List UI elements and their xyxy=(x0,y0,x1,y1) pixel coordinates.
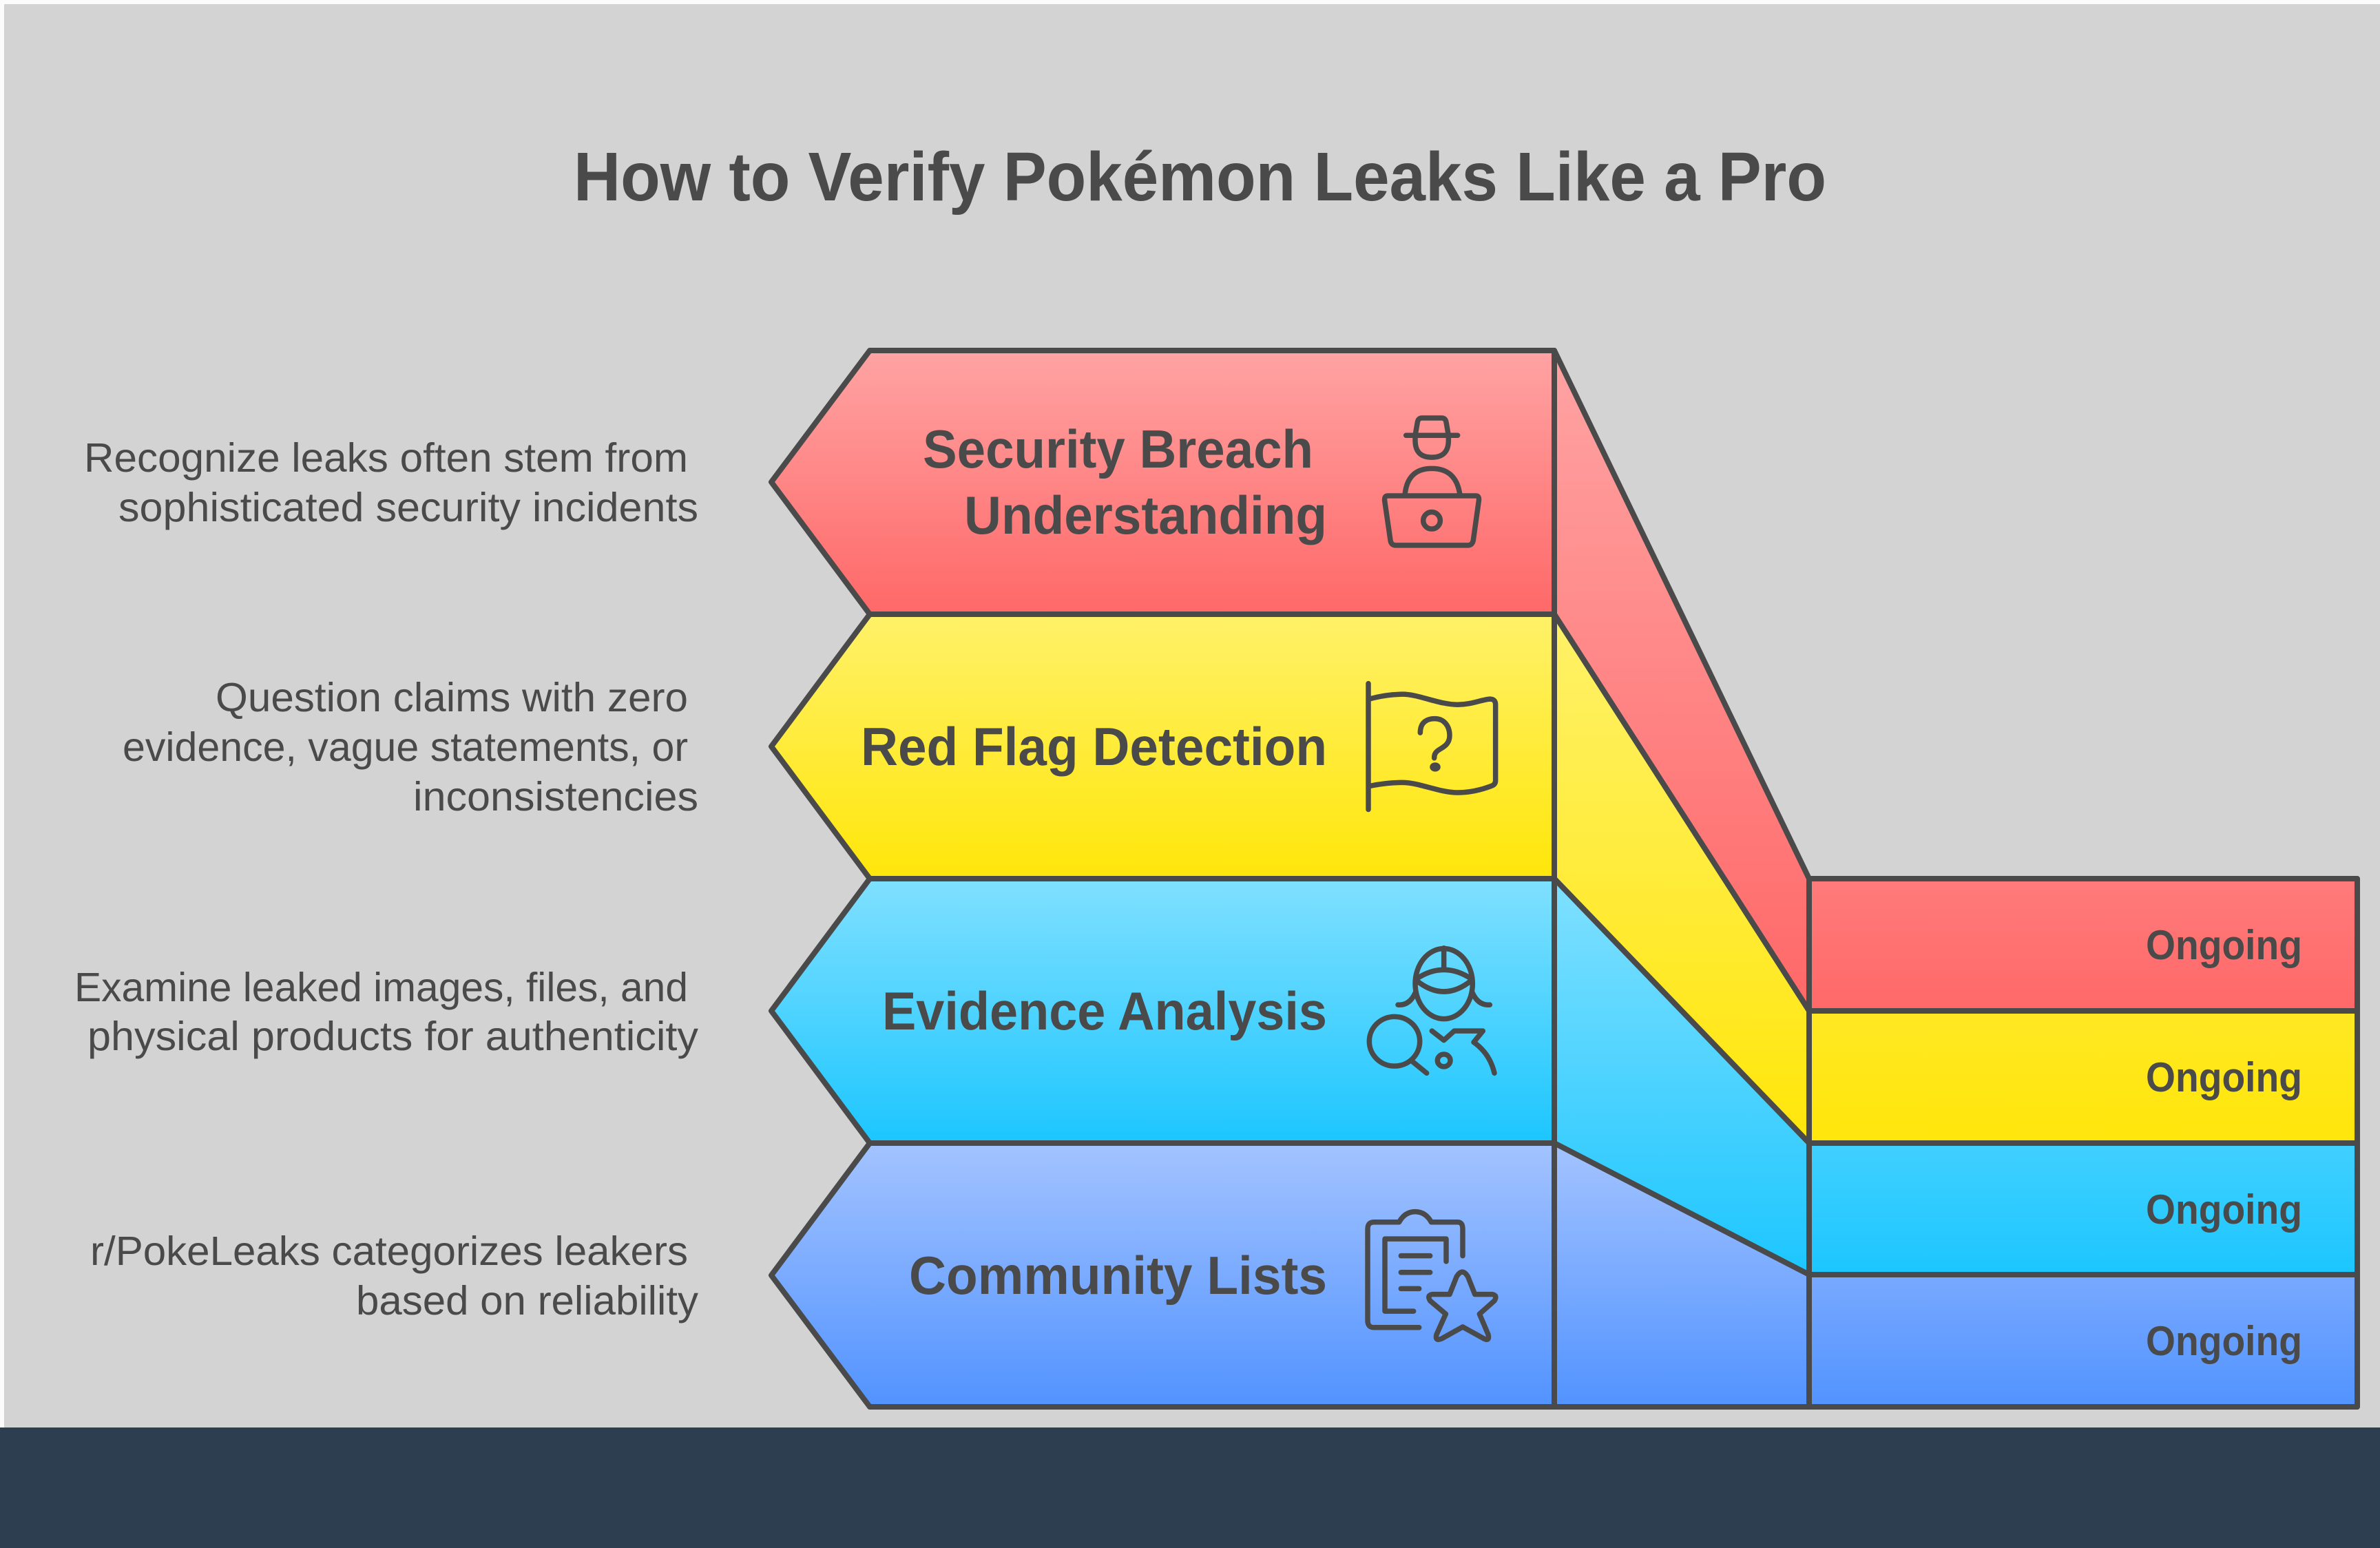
description: community lists: r/PokeLeaks categorizes leakers xyxy=(90,1228,688,1274)
connector band: yellow xyxy=(1554,614,1809,1143)
heading: security breach understanding xyxy=(923,419,1327,545)
heading: security breach understanding: Understanding xyxy=(964,485,1327,545)
description: community lists xyxy=(90,1228,699,1324)
heading: red flag detection: Red Flag Detection xyxy=(861,716,1327,777)
description: red flags xyxy=(123,675,698,819)
status row: red: Ongoing xyxy=(2146,922,2302,968)
row: evidence analysis xyxy=(771,879,1554,1143)
connector band: blue xyxy=(1554,879,1809,1275)
heading: security breach understanding: Security Breach xyxy=(923,419,1313,479)
description: red flags: inconsistencies xyxy=(413,774,698,819)
heading: community lists: Community Lists xyxy=(909,1245,1327,1306)
description: red flags: evidence, vague statements, or xyxy=(123,724,688,770)
arrow block yellow xyxy=(771,614,1554,879)
description: security breach: Recognize leaks often stem from xyxy=(84,435,688,481)
title: How to Verify Pokémon Leaks Like a Pro xyxy=(574,138,1826,216)
status row: blue: Ongoing xyxy=(2146,1186,2302,1233)
status row: red xyxy=(1809,879,2357,1011)
icon: hacker at laptop xyxy=(1385,418,1479,545)
arrow block periwinkle xyxy=(771,1143,1554,1407)
row: security breach understanding xyxy=(771,351,1554,614)
connector band: periwinkle xyxy=(1554,1143,1809,1407)
row: red flag detection xyxy=(771,614,1554,879)
icon: clipboard with star xyxy=(1368,1212,1496,1339)
arrow block red xyxy=(771,351,1554,614)
icon: detective with magnifier xyxy=(1369,948,1494,1073)
description: security breach: sophisticated security incidents xyxy=(118,485,698,530)
status row: yellow: Ongoing xyxy=(2146,1054,2302,1100)
status row: blue xyxy=(1809,1143,2357,1275)
status row: periwinkle: Ongoing xyxy=(2146,1318,2302,1364)
status row: periwinkle xyxy=(1809,1275,2357,1407)
status row: yellow xyxy=(1809,1011,2357,1143)
connector band: red xyxy=(1554,351,1809,1011)
arrow block blue xyxy=(771,879,1554,1143)
description: evidence analysis: Examine leaked images, files, and xyxy=(74,965,688,1010)
description: red flags: Question claims with zero xyxy=(216,675,688,720)
footer band xyxy=(0,1427,2380,1548)
description: evidence analysis: physical products for authenticity xyxy=(87,1014,699,1059)
description: security breach xyxy=(84,435,698,530)
description: evidence analysis xyxy=(74,965,699,1059)
heading: evidence analysis: Evidence Analysis xyxy=(882,981,1327,1041)
row: community lists xyxy=(771,1143,1554,1407)
icon: flag with question mark xyxy=(1368,684,1496,810)
description: community lists: based on reliability xyxy=(356,1278,699,1324)
